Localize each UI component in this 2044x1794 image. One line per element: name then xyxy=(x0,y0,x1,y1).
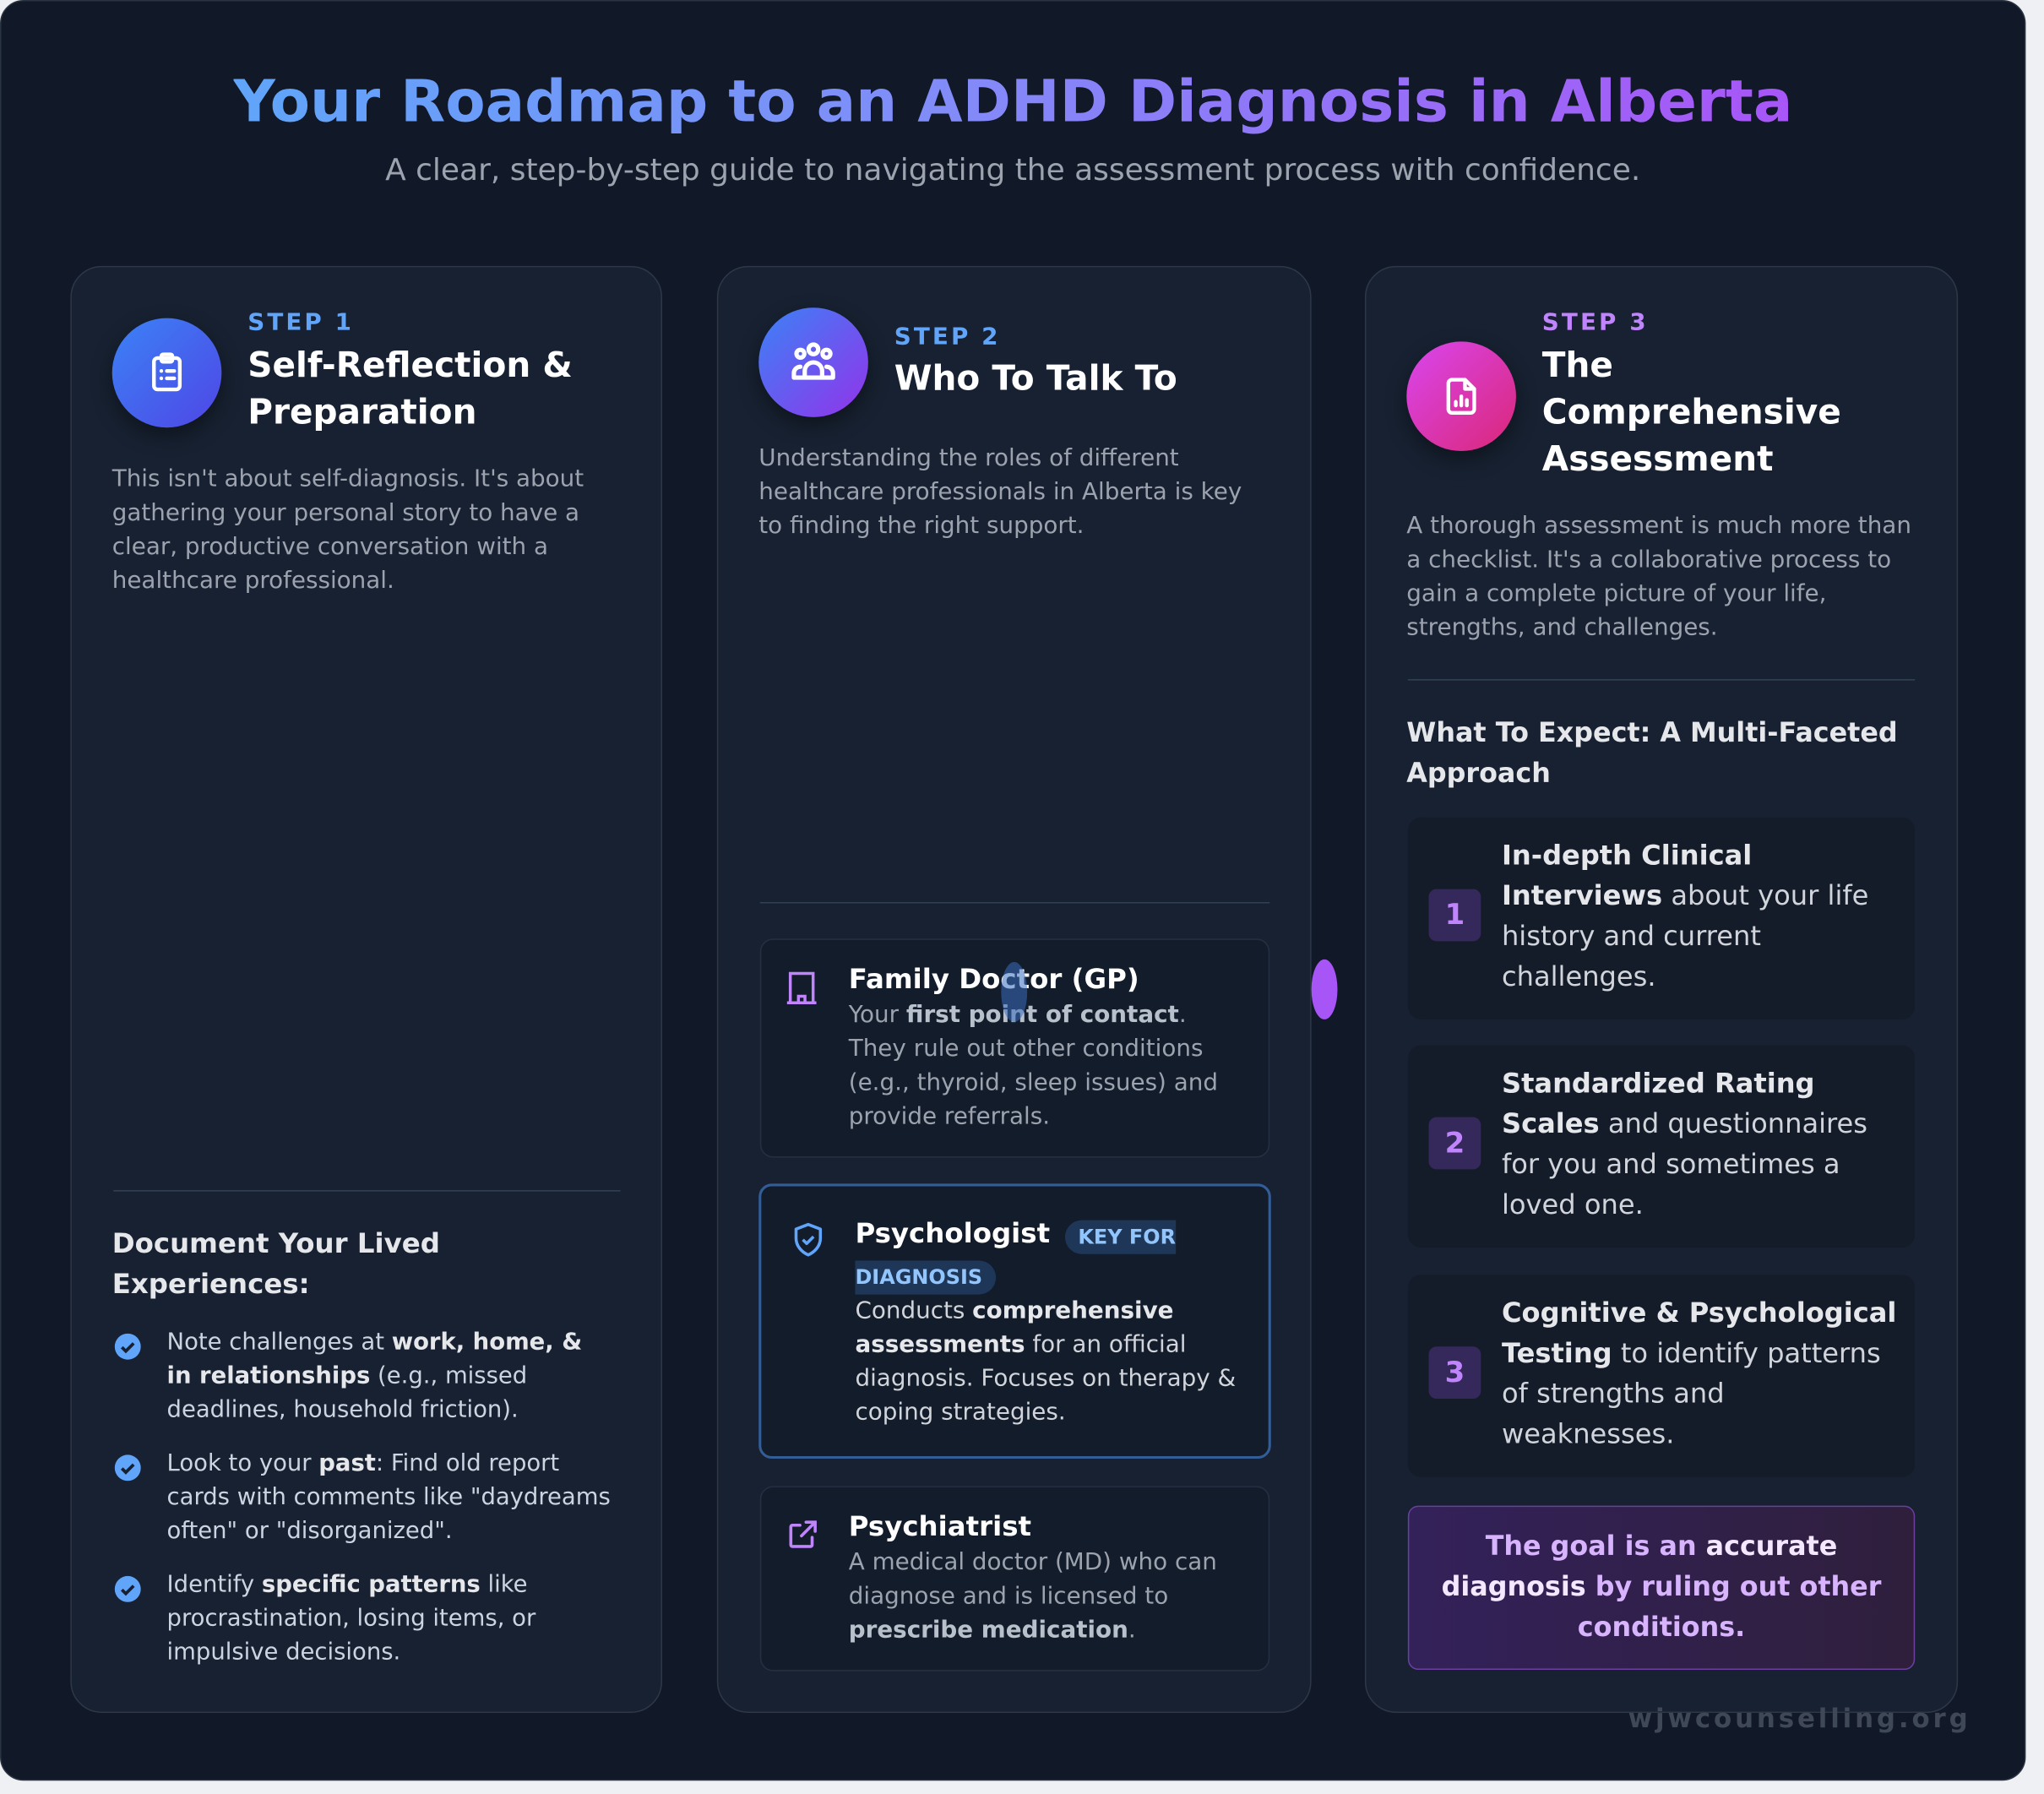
title: Your Roadmap to an ADHD Diagnosis in Alberta xyxy=(233,68,1792,136)
text block: A thorough assessment is much more than a checklist. It's a collaborative process to gain a complete picture of your life, strengths, and challenges. xyxy=(1406,513,1911,641)
marker: purple xyxy=(1312,960,1337,1019)
box: family doctor: Your first point of contact. They rule out other conditions (e.g., thyroid, sleep issues) and provide referrals. xyxy=(849,1001,1218,1130)
item 2: Standardized Rating xyxy=(1502,1068,1815,1099)
icon: building xyxy=(787,971,817,1004)
panel: step 2 xyxy=(717,266,1312,1713)
box: family doctor xyxy=(760,938,1269,1158)
box: psychologist: Psychologist xyxy=(855,1218,1050,1249)
item 3: weaknesses. xyxy=(1502,1418,1674,1449)
item 1 xyxy=(1408,818,1915,1019)
list item 2: often" or "disorganized". xyxy=(167,1517,453,1545)
list item 1 xyxy=(115,1329,582,1423)
decorative marker xyxy=(1001,962,1027,1022)
item 3: 3 xyxy=(1445,1356,1465,1389)
heading: The Comprehensive Assessment xyxy=(1542,347,1841,480)
icon: shield xyxy=(794,1223,823,1257)
list item 3: Identify specific patterns like xyxy=(167,1571,528,1598)
item 2: loved one. xyxy=(1502,1189,1644,1220)
heading: Self-Reflection & Preparation xyxy=(247,347,573,432)
step label: STEP 1 xyxy=(247,309,354,336)
text block: Understanding the roles of different healthcare professionals in Alberta is key to finding the right support. xyxy=(758,444,1242,540)
watermark: wjwcounselling.org xyxy=(1628,1703,1971,1734)
list item 1: Note challenges at work, home, & xyxy=(167,1329,582,1356)
step label: STEP 2 xyxy=(894,323,1001,351)
item 3: of strengths and xyxy=(1502,1378,1725,1409)
item 2 xyxy=(1408,1046,1915,1248)
icon: document xyxy=(1406,341,1516,451)
item 1: 1 xyxy=(1445,899,1465,932)
box: family doctor: Family Doctor (GP) xyxy=(849,964,1139,995)
icon: external link xyxy=(789,1520,817,1548)
list item 3 xyxy=(115,1571,535,1666)
panel: step 1 xyxy=(70,266,662,1713)
box: psychologist xyxy=(758,1183,1271,1459)
item 1: history and current xyxy=(1502,921,1761,952)
box: psychiatrist xyxy=(760,1486,1269,1672)
box: psychiatrist: A medical doctor (MD) who can diagnose and is licensed to prescribe medication. xyxy=(849,1549,1217,1644)
subtitle: A clear, step-by-step guide to navigating the assessment process with confidence. xyxy=(385,153,1640,188)
panel: step 3 xyxy=(1365,266,1958,1713)
list item 2 xyxy=(115,1449,611,1545)
box: psychologist: Conducts comprehensive assessments for an official diagnosis. Focuses on therapy & coping strategies. xyxy=(855,1297,1236,1426)
subheading: Document Your Lived Experiences: xyxy=(112,1228,440,1300)
subheading: What To Expect: A Multi-Faceted Approach xyxy=(1406,717,1898,789)
list item 3: impulsive decisions. xyxy=(167,1639,400,1666)
item 1: In-depth Clinical xyxy=(1502,840,1752,871)
item 3 xyxy=(1408,1275,1915,1477)
item 1: Interviews about your life xyxy=(1502,880,1868,911)
callout: goal xyxy=(1408,1506,1915,1670)
list item 3: procrastination, losing items, or xyxy=(167,1605,535,1632)
item 1: challenges. xyxy=(1502,960,1656,992)
icon: clipboard xyxy=(112,318,221,427)
list item 2: Look to your past: Find old report xyxy=(167,1449,559,1477)
step label: STEP 3 xyxy=(1542,309,1649,336)
box: psychiatrist: Psychiatrist xyxy=(849,1511,1031,1542)
list item 2: cards with comments like "daydreams xyxy=(167,1483,611,1511)
box: psychologist: KEY FOR xyxy=(1078,1226,1176,1249)
item 2: for you and sometimes a xyxy=(1502,1149,1840,1180)
heading: Who To Talk To xyxy=(894,360,1177,399)
callout: goal: The goal is an accurate diagnosis by ruling out other conditions. xyxy=(1442,1530,1881,1643)
item 2: Scales and questionnaires xyxy=(1502,1108,1867,1139)
text block: This isn't about self-diagnosis. It's about gathering your personal story to have a clear, productive conversation with a healthcare professional. xyxy=(112,465,584,595)
list item 1: deadlines, household friction). xyxy=(167,1396,519,1423)
item 2: 2 xyxy=(1445,1127,1465,1160)
list item 1: in relationships (e.g., missed xyxy=(167,1362,527,1389)
icon: people xyxy=(758,307,868,417)
box: psychologist: DIAGNOSIS xyxy=(855,1266,982,1289)
item 3: Cognitive & Psychological xyxy=(1502,1297,1896,1329)
item 3: Testing to identify patterns xyxy=(1502,1337,1881,1369)
